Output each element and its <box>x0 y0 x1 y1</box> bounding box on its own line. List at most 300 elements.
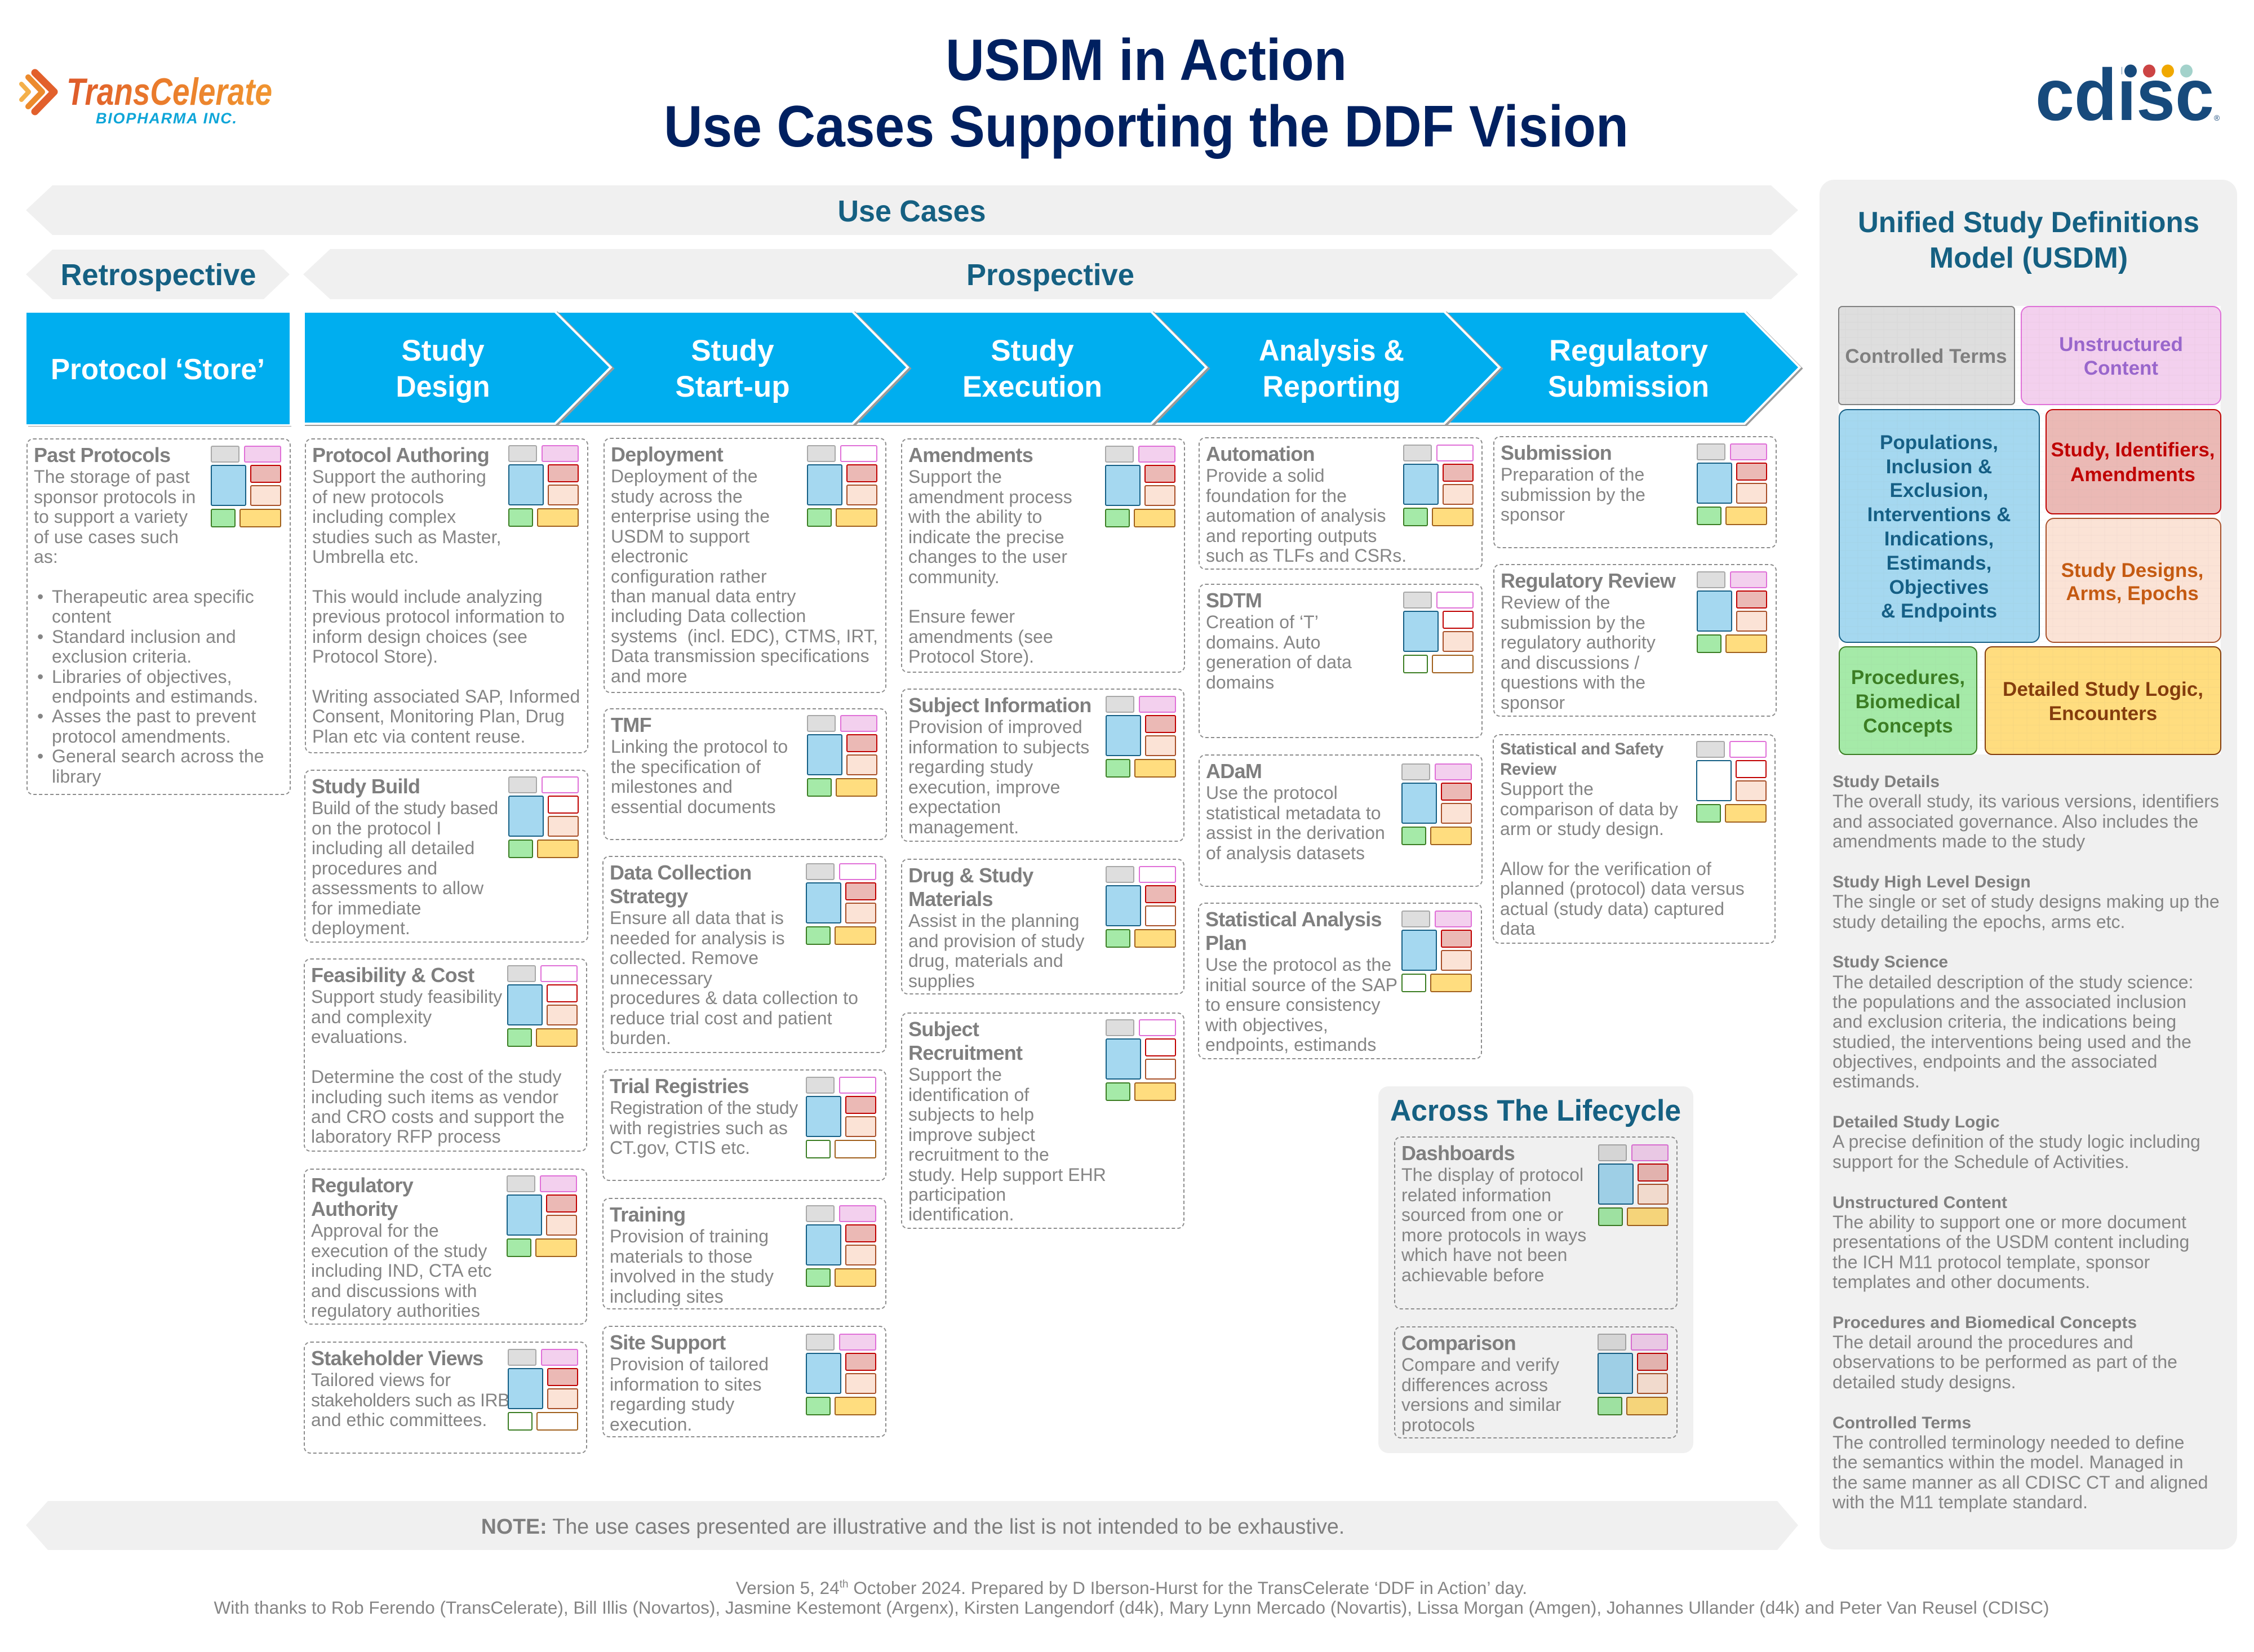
card: Protocol Authoring: previous protocol information to <box>312 606 565 627</box>
card: Data Collection Strategy: collected. Remove <box>610 948 758 968</box>
block: Populations: Estimands, <box>1887 552 1991 574</box>
card: Past Protocols: protocol amendments. <box>52 726 231 747</box>
card: Statistical Analysis Plan: endpoints, estimands <box>1205 1034 1376 1055</box>
block: Populations: Objectives <box>1889 576 1989 598</box>
block: Controlled Terms: Controlled Terms <box>1845 345 2007 367</box>
card: Protocol Authoring: inform design choices (see <box>312 627 527 647</box>
block: Unstructured Content: Unstructured <box>2059 334 2183 356</box>
card: Protocol Authoring: Writing associated SAP, Informed <box>312 686 580 707</box>
card: Site Support: Site Support <box>610 1331 726 1354</box>
block: Procedures: Biomedical <box>1856 691 1960 713</box>
card: Amendments: Protocol Store). <box>908 646 1034 667</box>
heading: Across The Lifecycle: Across The Lifecycle <box>1390 1094 1681 1127</box>
card: Protocol Authoring: including complex <box>312 507 456 527</box>
card: Regulatory Authority: Authority <box>311 1197 398 1220</box>
card: Statistical Analysis Plan: initial source of the SAP <box>1205 975 1397 995</box>
text block: USDM definitions <box>1833 772 2220 1512</box>
card: Feasibility and Cost: Support study feasibility <box>311 987 502 1007</box>
card: Past Protocols: endpoints and estimands. <box>52 686 258 707</box>
card: Statistical and Safety Review: Allow for the verification of <box>1500 859 1711 879</box>
card: Deployment: configuration rather <box>611 566 767 586</box>
stage: Protocol Store: Protocol ‘Store’ <box>51 353 265 386</box>
stage: Study Design: Design <box>396 370 490 403</box>
chart: USDM model blocks <box>1839 306 2221 754</box>
card: Trial Registries: Registration of the study <box>610 1098 798 1118</box>
card: Training: Training <box>610 1203 685 1226</box>
card: Past Protocols: • <box>37 746 43 766</box>
card: Data Collection Strategy: Strategy <box>610 885 687 908</box>
text block: USDM definitions: support for the Schedule of Activities. <box>1833 1152 2129 1172</box>
card: ADaM: assist in the derivation <box>1206 823 1385 843</box>
card: Subject Recruitment: recruitment to the <box>908 1144 1049 1165</box>
card: Comparison: protocols <box>1401 1415 1475 1435</box>
card: Site Support: information to sites <box>610 1374 762 1395</box>
card: Past Protocols: The storage of past <box>34 467 190 487</box>
block: Populations: Interventions & <box>1867 504 2011 526</box>
text block: USDM definitions: A precise definition of the study logic including <box>1833 1131 2200 1152</box>
card: Deployment: Deployment <box>611 443 723 466</box>
card: Protocol Authoring: This would include analyzing <box>312 587 543 607</box>
panel: USDM heading: Model (USDM) <box>1929 242 2128 274</box>
card: Study Build: on the protocol I <box>312 818 441 838</box>
card: ADaM: statistical metadata to <box>1206 803 1381 823</box>
card: Subject Information: execution, improve <box>908 777 1060 797</box>
card: Amendments: changes to the user <box>908 547 1067 567</box>
card: Dashboards: more protocols in ways <box>1401 1225 1586 1245</box>
card: Deployment: and more <box>611 666 687 686</box>
card: Past Protocols: Standard inclusion and <box>52 627 236 647</box>
text block: USDM definitions: objectives, endpoints and the associated <box>1833 1051 2157 1072</box>
footer: Version 5, 24th October 2024. Prepared by D Iberson-Hurst for the TransCelerate ‘DDF in Action’ day. <box>736 1578 1527 1598</box>
text block: USDM definitions: the semantics within the model. Managed in <box>1833 1452 2184 1472</box>
text block: USDM definitions: The single or set of study designs making up the <box>1833 891 2220 912</box>
card: Past Protocols: • <box>37 667 43 687</box>
card: Regulatory Authority <box>304 1169 587 1325</box>
stage: Analysis and Reporting <box>1151 313 1500 424</box>
card: Statistical Analysis Plan <box>1198 903 1482 1059</box>
banner: Use Cases <box>26 185 1798 235</box>
card: Deployment: enterprise using the <box>611 506 770 526</box>
card: Drug and Study Materials: Materials <box>908 887 993 911</box>
card: Trial Registries <box>602 1069 886 1181</box>
card: Protocol Authoring: studies such as Master, <box>312 527 502 547</box>
card: Feasibility and Cost <box>304 958 587 1152</box>
card: Subject Recruitment: identification. <box>908 1204 1014 1224</box>
text block: USDM definitions: and associated governance. Also includes the <box>1833 811 2198 832</box>
card: Dashboards: which have not been <box>1401 1245 1568 1265</box>
card: Protocol Authoring: of new protocols <box>312 487 444 507</box>
block: Controlled Terms <box>1839 307 2015 405</box>
card: Statistical Analysis Plan: Use the protocol as the <box>1205 954 1391 975</box>
logo: CDISC: ® <box>2214 113 2220 122</box>
card: Drug and Study Materials: and provision of study <box>908 931 1084 951</box>
block: Study, Identifiers, Amendments: Study, Identifiers, <box>2051 439 2215 461</box>
card: Submission: Preparation of the <box>1501 464 1644 485</box>
card: Deployment <box>604 438 886 693</box>
card: Study Build: including all detailed <box>312 838 474 858</box>
block: Populations: & Endpoints <box>1881 600 1997 622</box>
block: Procedures: Concepts <box>1863 715 1953 737</box>
card: Regulatory Review: Review of the <box>1501 592 1610 612</box>
card: Amendments: Support the <box>908 467 1002 487</box>
card: Dashboards: Dashboards <box>1401 1142 1515 1165</box>
text block: USDM definitions: Unstructured Content <box>1833 1193 2007 1212</box>
card: Study Build: procedures and <box>312 858 437 878</box>
card: Past Protocols: of use cases such <box>34 527 179 547</box>
card: Subject Recruitment: Recruitment <box>908 1041 1022 1064</box>
text block: USDM definitions: Procedures and Biomedical Concepts <box>1833 1313 2137 1332</box>
card: Site Support: Provision of tailored <box>610 1354 769 1374</box>
block: Detailed Study Logic <box>1985 647 2221 754</box>
text block: USDM definitions: estimands. <box>1833 1071 1920 1091</box>
text block: USDM definitions: the ICH M11 protocol template, sponsor <box>1833 1252 2150 1272</box>
card: Past Protocols: to support a variety <box>34 507 188 527</box>
card: Training: involved in the study <box>610 1266 774 1286</box>
text block: USDM definitions: Study Science <box>1833 953 1948 971</box>
card: Site Support <box>602 1326 886 1437</box>
card: Amendments: Amendments <box>908 443 1033 467</box>
text block: USDM definitions: The detail around the procedures and <box>1833 1332 2133 1352</box>
text block: USDM definitions: Detailed Study Logic <box>1833 1113 2000 1131</box>
card: Automation: such as TLFs and CSRs. <box>1206 545 1406 566</box>
card: Data Collection Strategy: reduce trial cost and patient <box>610 1007 832 1028</box>
card: Past Protocols: content <box>52 606 111 627</box>
card: Past Protocols: Asses the past to prevent <box>52 706 256 726</box>
card: Feasibility and Cost: laboratory RFP process <box>311 1126 501 1147</box>
card: Subject Recruitment: study. Help support EHR <box>908 1164 1106 1184</box>
card: Statistical and Safety Review: Review <box>1500 760 1556 779</box>
block: Study, Identifiers, Amendments: Amendments <box>2070 464 2195 486</box>
card: Data Collection Strategy: Ensure all data that is <box>610 908 784 928</box>
card: ADaM <box>1199 754 1483 887</box>
panel: USDM background <box>1820 180 2237 1549</box>
stage: Protocol Store <box>26 313 291 427</box>
card: Study Build: Build of the study based <box>312 798 498 818</box>
card: Regulatory Authority: including IND, CTA etc <box>311 1260 492 1281</box>
card: Automation: Provide a solid <box>1206 465 1325 486</box>
card: Past Protocols: exclusion criteria. <box>52 646 192 667</box>
card: Subject Information <box>901 689 1184 842</box>
stage: Study Start-up <box>554 313 908 424</box>
card: TMF: essential documents <box>611 797 776 817</box>
card: Training: including sites <box>610 1286 724 1307</box>
card: Amendments: community. <box>908 567 1000 587</box>
card: Subject Recruitment <box>901 1012 1184 1229</box>
card: Submission: sponsor <box>1501 504 1565 525</box>
panel: USDM heading: Unified Study Definitions <box>1858 206 2199 239</box>
card: Subject Information: Provision of improved <box>908 717 1082 737</box>
card: Regulatory Review: submission by the <box>1501 612 1645 633</box>
card: Study Build: assessments to allow <box>312 878 483 898</box>
card: Past Protocols: • <box>37 706 43 726</box>
card: Study Build: Study Build <box>312 775 420 798</box>
card: Statistical and Safety Review: comparison of data by <box>1500 799 1678 819</box>
card: Feasibility and Cost: and complexity <box>311 1007 432 1027</box>
banner: Retrospective: Retrospective <box>61 258 256 292</box>
card: Dashboards <box>1394 1136 1678 1309</box>
card: Site Support: execution. <box>610 1414 692 1435</box>
banner: Retrospective <box>26 250 290 299</box>
text block: USDM definitions: amendments made to the study <box>1833 831 2085 851</box>
card: Regulatory Authority: Regulatory <box>311 1174 413 1197</box>
card: Drug and Study Materials: Assist in the planning <box>908 911 1080 931</box>
card: Past Protocols: sponsor protocols in <box>34 487 196 507</box>
text block: USDM definitions: detailed study designs. <box>1833 1372 2016 1392</box>
stage: Study Start-up: Study <box>691 334 774 367</box>
stage: Study Start-up: Start-up <box>675 370 790 403</box>
stage: Regulatory Submission: Regulatory <box>1549 334 1709 367</box>
card: Deployment: including Data collection <box>611 606 806 626</box>
card: Deployment: systems (incl. EDC), CTMS, IRT, <box>611 626 878 646</box>
card: Trial Registries: CT.gov, CTIS etc. <box>610 1138 750 1158</box>
card: ADaM: of analysis datasets <box>1206 843 1365 863</box>
card: Subject Recruitment: identification of <box>908 1085 1029 1105</box>
card: Regulatory Authority: regulatory authorities <box>311 1300 480 1321</box>
text block: USDM definitions: Study Details <box>1833 772 1940 791</box>
card: Deployment: Data transmission specifications <box>611 646 869 666</box>
card: Statistical and Safety Review: Statistical and Safety <box>1500 740 1663 758</box>
card: TMF <box>604 708 887 840</box>
card: Deployment: USDM to support <box>611 526 749 547</box>
card: Statistical Analysis Plan: with objectives, <box>1205 1015 1328 1035</box>
text block: USDM definitions: Controlled Terms <box>1833 1413 1971 1432</box>
card: Site Support: regarding study <box>610 1394 734 1414</box>
card: Regulatory Authority: and discussions with <box>311 1281 477 1301</box>
card: Feasibility and Cost: Feasibility & Cost <box>311 963 474 987</box>
card: Amendments: indicate the precise <box>908 527 1064 547</box>
block: Populations: Populations, <box>1880 432 1998 454</box>
block: Study, Identifiers, Amendments <box>2046 410 2221 514</box>
text block: USDM definitions: with the M11 template standard. <box>1833 1492 2088 1512</box>
card: Dashboards: related information <box>1401 1185 1551 1205</box>
card: TMF: TMF <box>611 713 651 736</box>
card: Data Collection Strategy: unnecessary <box>610 968 712 988</box>
card: Past Protocols: • <box>37 587 43 607</box>
card: Subject Information: regarding study <box>908 757 1033 777</box>
text block: USDM definitions: and exclusion criteria, the indications being <box>1833 1011 2176 1032</box>
card: Feasibility and Cost: including such items as vendor <box>311 1086 558 1107</box>
card: Data Collection Strategy: needed for analysis is <box>610 928 785 948</box>
card: Statistical and Safety Review: Support the <box>1500 779 1594 799</box>
card: Past Protocols: as: <box>34 547 58 567</box>
card: Stakeholder Views: stakeholders such as IRB <box>311 1390 509 1410</box>
card: Automation: automation of analysis <box>1206 505 1386 526</box>
card: Dashboards: achievable before <box>1401 1264 1544 1285</box>
card: Trial Registries: Trial Registries <box>610 1074 749 1098</box>
card: Training: materials to those <box>610 1246 752 1267</box>
card: Stakeholder Views: Tailored views for <box>311 1370 451 1390</box>
banner: Use Cases: Use Cases <box>837 194 986 228</box>
card: Subject Information: expectation <box>908 797 1001 817</box>
card: SDTM: generation of data <box>1206 652 1352 672</box>
block: Unstructured Content: Content <box>2084 357 2158 379</box>
card: Training: Provision of training <box>610 1226 769 1246</box>
card: TMF: Linking the protocol to <box>611 736 788 757</box>
card: Regulatory Review: Regulatory Review <box>1501 569 1675 592</box>
card: Automation <box>1199 437 1483 570</box>
stage: Study Design: Study <box>401 334 485 367</box>
card: Protocol Authoring: Umbrella etc. <box>312 547 419 567</box>
card: Feasibility and Cost: and CRO costs and support the <box>311 1107 565 1127</box>
block: Unstructured Content <box>2021 307 2221 405</box>
card: Stakeholder Views: and ethic committees. <box>311 1410 487 1430</box>
card: Deployment: Deployment of the <box>611 466 758 486</box>
card: Statistical Analysis Plan: Plan <box>1205 931 1246 954</box>
stage: Study Execution: Study <box>991 334 1074 367</box>
card: Protocol Authoring: Protocol Authoring <box>312 443 489 467</box>
card: Subject Recruitment: Subject <box>908 1018 979 1041</box>
card: Subject Recruitment: participation <box>908 1184 1006 1205</box>
card: Past Protocols: General search across the <box>52 746 264 766</box>
card: Past Protocols <box>26 438 291 795</box>
card: Stakeholder Views: Stakeholder Views <box>311 1347 483 1370</box>
card: TMF: the specification of <box>611 757 761 777</box>
stage: Study Execution: Execution <box>962 370 1102 403</box>
card: Study Build <box>304 770 588 943</box>
stage: Study Execution <box>852 313 1207 424</box>
block: Populations: Exclusion, <box>1889 479 1989 501</box>
text block: USDM definitions: the same manner as all CDISC CT and aligned <box>1833 1472 2208 1493</box>
card: Study Build: for immediate <box>312 898 421 918</box>
block: Study Designs <box>2046 518 2221 642</box>
card: Subject Information: Subject Information <box>908 694 1091 717</box>
card: Drug and Study Materials <box>901 859 1184 994</box>
block: Study Designs: Arms, Epochs <box>2066 583 2199 605</box>
card: Past Protocols: • <box>37 627 43 647</box>
card: Regulatory Review: questions with the <box>1501 672 1645 692</box>
footer: With thanks to Rob Ferendo (TransCelerate), Bill Illis (Novartos), Jasmine Kestemont (Argenx), Kirsten Langendorf (d4k), Mary Lynn Mercado (Novartis), Lissa Morgan (Amgen), Johannes Ullander (d4k) and Peter Van Reusel (CDISC) <box>214 1597 2049 1618</box>
card: Subject Recruitment: subjects to help <box>908 1104 1034 1125</box>
card: Protocol Authoring: Protocol Store). <box>312 646 438 667</box>
card: Deployment: than manual data entry <box>611 586 796 606</box>
card: TMF: milestones and <box>611 776 733 797</box>
card: Deployment: electronic <box>611 546 688 566</box>
card: Training <box>602 1198 886 1309</box>
card: Amendments: amendments (see <box>908 627 1053 647</box>
card: Study Build: deployment. <box>312 918 410 938</box>
card: Amendments <box>901 438 1185 673</box>
text block: USDM definitions: observations to be performed as part of the <box>1833 1352 2177 1372</box>
card: SDTM: domains. Auto <box>1206 632 1320 652</box>
card: Regulatory Authority: Approval for the <box>311 1220 439 1241</box>
card: Regulatory Review: regulatory authority <box>1501 632 1656 652</box>
text block: USDM definitions: The ability to support one or more document <box>1833 1212 2186 1232</box>
card: Submission: Submission <box>1501 441 1612 464</box>
card: Statistical and Safety Review: arm or study design. <box>1500 819 1664 839</box>
card: Deployment: study across the <box>611 486 743 507</box>
card: Statistical Analysis Plan: to ensure consistency <box>1205 994 1381 1015</box>
card: Protocol Authoring: Plan etc via content reuse. <box>312 726 525 747</box>
banner: note <box>26 1501 1798 1550</box>
title: USDM in Action <box>946 28 1347 93</box>
card: Automation: Automation <box>1206 442 1315 465</box>
card: Past Protocols: Therapeutic area specific <box>52 587 254 607</box>
card: Comparison: Comparison <box>1401 1331 1516 1355</box>
title <box>664 28 1629 159</box>
card: Regulatory Authority: execution of the study <box>311 1241 487 1261</box>
card: Protocol Authoring <box>305 438 588 753</box>
card: Submission: submission by the <box>1501 485 1645 505</box>
card: ADaM: Use the protocol <box>1206 783 1338 803</box>
logo: TransCelerate <box>21 70 272 127</box>
card: Amendments: with the ability to <box>908 507 1042 527</box>
stage: Analysis and Reporting: Reporting <box>1262 370 1401 403</box>
block: Detailed Study Logic: Detailed Study Logic, <box>2003 678 2203 700</box>
card: Data Collection Strategy: procedures & data collection to <box>610 988 858 1008</box>
text block: USDM definitions: studied, the interventions being used and the <box>1833 1032 2191 1052</box>
card: Subject Recruitment: improve subject <box>908 1125 1035 1145</box>
text block: USDM definitions: The controlled terminology needed to define <box>1833 1432 2184 1453</box>
stage: Study Design <box>305 313 611 424</box>
card: ADaM: ADaM <box>1206 760 1262 783</box>
card: Comparison: differences across <box>1401 1375 1548 1395</box>
panel: Across The Lifecycle background <box>1378 1086 1693 1453</box>
card: Comparison: versions and similar <box>1401 1395 1561 1415</box>
title: Use Cases Supporting the DDF Vision <box>664 94 1629 159</box>
stage: Regulatory Submission <box>1444 313 1800 424</box>
card: Amendments: Ensure fewer <box>908 606 1015 627</box>
card: Subject Recruitment: Support the <box>908 1064 1002 1085</box>
card: Amendments: amendment process <box>908 487 1072 507</box>
card: SDTM: Creation of ‘T’ <box>1206 612 1319 632</box>
card: Dashboards: The display of protocol <box>1401 1165 1583 1185</box>
text block: USDM definitions: templates and other documents. <box>1833 1272 2090 1292</box>
card: Regulatory Review: and discussions / <box>1501 652 1639 673</box>
block: Study Designs: Study Designs, <box>2061 559 2203 581</box>
card: Protocol Authoring: Consent, Monitoring Plan, Drug <box>312 706 565 726</box>
card: Comparison: Compare and verify <box>1401 1355 1559 1375</box>
card: Automation: foundation for the <box>1206 486 1347 506</box>
card: Data Collection Strategy: burden. <box>610 1028 671 1048</box>
card: Drug and Study Materials: supplies <box>908 971 975 991</box>
card: Submission <box>1493 436 1777 548</box>
card: Trial Registries: with registries such as <box>610 1118 788 1138</box>
banner: Prospective <box>303 249 1798 299</box>
card: Subject Information: management. <box>908 817 1019 837</box>
card: SDTM: SDTM <box>1206 589 1262 612</box>
card: SDTM: domains <box>1206 672 1274 692</box>
footer <box>214 1578 2049 1618</box>
card: Drug and Study Materials: drug, materials and <box>908 951 1063 971</box>
block: Procedures: Procedures, <box>1851 667 1965 689</box>
block: Populations: Indications, <box>1884 528 1994 550</box>
block: Procedures <box>1839 647 1977 754</box>
card: Subject Information: information to subjects <box>908 737 1089 757</box>
card: Statistical and Safety Review <box>1493 734 1776 944</box>
block: Populations <box>1839 410 2039 642</box>
card: Protocol Authoring: Support the authoring <box>312 467 486 487</box>
text block: USDM definitions: study detailing the epochs, arms etc. <box>1833 912 2125 932</box>
card: Statistical and Safety Review: actual (study data) captured <box>1500 899 1724 919</box>
text block: USDM definitions: The detailed description of the study science: <box>1833 972 2193 992</box>
card: Data Collection Strategy <box>602 856 886 1053</box>
card: Past Protocols: Past Protocols <box>34 443 170 467</box>
card: Stakeholder Views <box>304 1342 587 1454</box>
card: Comparison <box>1394 1326 1678 1438</box>
card: Feasibility and Cost: evaluations. <box>311 1027 407 1047</box>
text block: USDM definitions: presentations of the USDM content including <box>1833 1232 2189 1252</box>
text block: USDM definitions: The overall study, its various versions, identifiers <box>1833 791 2219 811</box>
stage: Analysis and Reporting: Analysis & <box>1259 334 1404 367</box>
block: Populations: Inclusion & <box>1886 456 1992 478</box>
card: Drug and Study Materials: Drug & Study <box>908 864 1033 887</box>
card: Dashboards: sourced from one or <box>1401 1205 1563 1225</box>
card: Statistical Analysis Plan: Statistical Analysis <box>1205 908 1382 931</box>
block: Detailed Study Logic: Encounters <box>2049 703 2157 725</box>
card: SDTM <box>1199 584 1483 738</box>
logo: TransCelerate: TransCelerate <box>66 70 272 113</box>
card: Past Protocols: library <box>52 766 101 787</box>
